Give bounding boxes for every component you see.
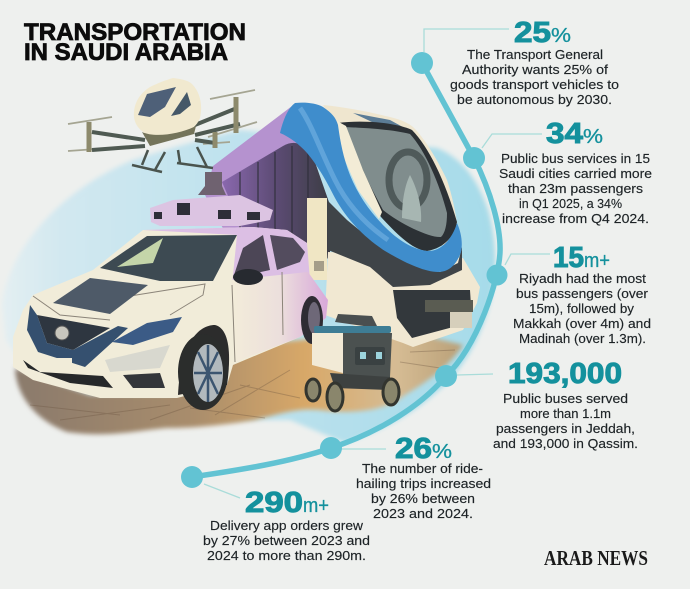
rear wheel rim: [308, 302, 320, 334]
lower grille: [23, 360, 113, 388]
stat: 193,000: [493, 358, 638, 451]
headlight: [112, 317, 182, 345]
logo: Arab News: ARAB NEWS: [544, 546, 648, 570]
drone belly: [142, 126, 196, 146]
timeline curve: [192, 63, 500, 477]
robot lid: [314, 326, 391, 333]
number plate area: [39, 358, 72, 374]
front wheel arch: [178, 325, 229, 395]
bus lower cream body: [325, 252, 480, 347]
windshield glass: [344, 127, 447, 237]
car doors: [232, 272, 328, 362]
rear wheel: [301, 296, 323, 344]
door and hood lines: [33, 272, 283, 362]
bus side windows: [222, 143, 330, 285]
stat: 26%: [356, 433, 491, 521]
windshield glare: [117, 238, 163, 267]
title: IN SAUDI ARABIA: [24, 39, 228, 66]
rotor blades: [68, 90, 257, 151]
car main body: [13, 227, 328, 398]
stat: 34%: than 23m passengers: [508, 182, 643, 196]
windshield seat back: [402, 175, 421, 222]
stat: 25%: Authority wants 25% of: [462, 63, 609, 77]
blue arch band: [280, 103, 462, 272]
illustration: autonomous car: [13, 172, 328, 410]
robot dark face: [343, 333, 392, 377]
stat: 15m+: m+: [584, 250, 610, 272]
windshield frame: [338, 122, 457, 251]
ground: brick pavement: [15, 330, 463, 434]
hood panel: [53, 278, 148, 314]
stat: 193,000: passengers in Jeddah,: [496, 422, 635, 436]
ticket pillar: [307, 198, 327, 280]
stat: 15m+: bus passengers (over: [516, 287, 648, 301]
stat: 26%: %: [432, 441, 452, 463]
window stripes: [240, 146, 308, 275]
sky backdrop: [2, 130, 495, 443]
bumper shading: [105, 345, 170, 372]
windshield seat detail: [389, 152, 427, 208]
illustration: delivery robot: [306, 314, 399, 411]
front grille: [37, 315, 110, 350]
robot wheels: [306, 379, 399, 411]
robot top hump: [335, 314, 378, 328]
stat: 15m+: Riyadh had the most: [519, 272, 647, 286]
blue highlight: [300, 108, 388, 240]
stat: 15m+: 15m), followed by: [529, 302, 635, 316]
stat: 25%: 25: [514, 17, 551, 49]
title: [24, 19, 246, 66]
stat: 193,000: and 193,000 in Qassim.: [493, 437, 638, 451]
stat: 25%: goods transport vehicles to: [450, 78, 619, 92]
stat: 290m+: Delivery app orders grew: [210, 519, 364, 533]
stat: 290m+: by 27% between 2023 and: [203, 534, 370, 548]
robot cream side: [312, 333, 343, 373]
roof glass strip: [353, 113, 418, 140]
stat: 26%: 2023 and 2024.: [373, 507, 473, 521]
rim spokes: [194, 345, 222, 402]
car roof tint: [143, 227, 310, 285]
stat: 26%: by 26% between: [371, 492, 475, 506]
stat: 26%: The number of ride-: [362, 462, 483, 476]
drone arms: [92, 108, 240, 150]
thin connector lines: [204, 29, 550, 498]
stat: 25%: %: [551, 25, 571, 47]
stat: 34%: 34: [546, 118, 583, 150]
stat: 34%: increase from Q4 2024.: [502, 212, 649, 226]
bus cream roof: [323, 105, 457, 247]
stat: 15m+: [513, 242, 651, 346]
stat: 26%: 26: [395, 433, 432, 465]
robot screen: [355, 347, 385, 365]
drone cabin: [134, 78, 201, 138]
sensor rig: [150, 195, 273, 226]
rig cameras: [154, 203, 260, 220]
drone window: [138, 87, 176, 117]
cream strip beside windshield: [337, 121, 382, 219]
front side window: [233, 235, 270, 278]
drone side window: [171, 92, 191, 116]
bus side: purple body: [205, 103, 330, 290]
stat: 25%: be autonomous by 2030.: [457, 93, 612, 107]
coupler plate: [450, 312, 472, 328]
bus lower dark panels: [327, 200, 462, 287]
front wheel rim: [193, 344, 223, 402]
illustration: autonomous bus: [205, 103, 480, 347]
stat: 290m+: 2024 to more than 290m.: [207, 549, 366, 563]
pillar qr code: [314, 261, 324, 271]
stat: 15m+: Madinah (over 1.3m).: [519, 332, 646, 346]
stat: 34%: [499, 118, 652, 226]
landing gear: [132, 147, 213, 172]
motors: [89, 97, 236, 152]
rear side window: [270, 235, 305, 270]
robot chassis: [330, 373, 390, 390]
wing mirror: [233, 269, 263, 285]
stat: 34%: %: [583, 126, 603, 148]
stat: 25%: The Transport General: [467, 48, 603, 62]
stat: 193,000: Public buses served: [503, 392, 628, 406]
stat: 290m+: m+: [303, 495, 329, 517]
timeline nodes: [181, 52, 508, 488]
stat: 15m+: Makkah (over 4m) and: [513, 317, 651, 331]
stat: 15m+: 15: [553, 242, 584, 274]
stat: 26%: hailing trips increased: [356, 477, 491, 491]
stat: 193,000: more than 1.1m: [520, 407, 611, 421]
chassis and coupler: [393, 290, 472, 338]
windshield: [100, 235, 237, 281]
stat: 34%: Public bus services in 15: [501, 152, 650, 166]
nose accent: [27, 305, 128, 367]
stat: 25%: [450, 17, 619, 107]
sensor mast: [198, 172, 226, 195]
grille logo: [55, 326, 69, 340]
stat: 193,000: 193,000: [508, 358, 622, 390]
coupler head: [425, 300, 473, 312]
stat: 34%: Saudi cities carried more: [499, 167, 652, 181]
title: TRANSPORTATION: [24, 19, 246, 46]
fog lamp: [123, 373, 165, 388]
stat: 34%: in Q1 2025, a 34%: [519, 197, 622, 211]
stat: 290m+: 290: [245, 487, 303, 519]
stat: 290m+: [203, 487, 370, 563]
front wheel tyre: [178, 334, 228, 410]
illustration: flying taxi drone: [68, 78, 257, 172]
screen eyes: [360, 352, 382, 359]
